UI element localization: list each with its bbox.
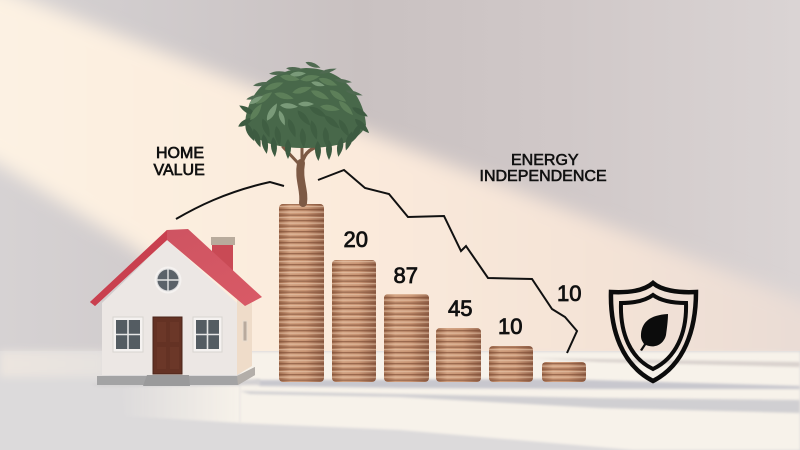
trend line left — [176, 182, 284, 219]
stack 4 — [436, 328, 481, 382]
background wall — [0, 0, 800, 360]
chimney — [211, 237, 235, 275]
front steps — [143, 375, 190, 386]
stack 3 — [384, 294, 429, 382]
stack values — [344, 227, 581, 339]
shield outer outline — [611, 283, 696, 381]
door — [153, 317, 182, 374]
house front wall — [102, 240, 237, 375]
label: home value — [154, 145, 205, 179]
left window — [113, 317, 143, 352]
value 10 (stack 5): 10 — [498, 314, 522, 339]
floor light and shadows — [0, 351, 800, 450]
stack 6 — [542, 362, 586, 382]
roof — [90, 229, 262, 306]
tree canopy — [237, 60, 371, 161]
stack 2 — [332, 260, 376, 382]
coin stacks — [279, 204, 586, 382]
value 10 (stack 6): 10 — [557, 281, 581, 306]
house — [90, 229, 262, 386]
label: home value: HOME — [156, 145, 204, 162]
right window — [193, 317, 222, 352]
stack 5 — [489, 346, 533, 382]
tree trunk — [283, 143, 328, 203]
value 20: 20 — [344, 227, 368, 252]
house base — [97, 367, 255, 385]
trend line right — [318, 170, 577, 353]
floor — [0, 351, 800, 450]
tree — [237, 60, 371, 203]
shield inner outline — [621, 295, 686, 369]
label: energy independence: ENERGY — [511, 152, 579, 169]
round window — [154, 266, 182, 294]
leaf — [640, 314, 668, 351]
value 87: 87 — [394, 263, 418, 288]
house side wall — [237, 296, 252, 375]
label: energy independence: INDEPENDENCE — [480, 168, 607, 185]
label: home value: VALUE — [154, 162, 205, 179]
value 45: 45 — [448, 296, 472, 321]
stack 1 — [279, 204, 324, 382]
shield icon — [611, 283, 696, 381]
label: energy independence — [480, 152, 607, 185]
